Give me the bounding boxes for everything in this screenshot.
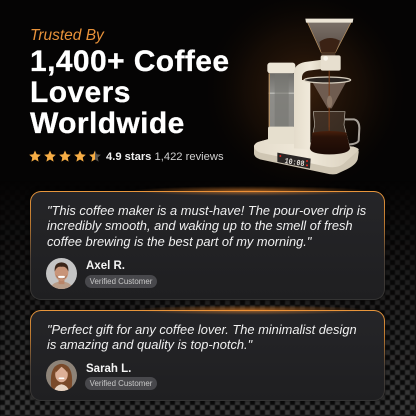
heading: 1,400+ Coffee xyxy=(30,44,229,78)
quote 1: incredibly smooth, and waking up to the smell of fresh xyxy=(47,218,353,233)
icon: star rating xyxy=(29,150,101,162)
panel: review 2 xyxy=(30,310,385,401)
badge: verified xyxy=(85,377,157,390)
card 2 top glow xyxy=(130,305,370,315)
badge: verified xyxy=(85,275,157,288)
name: Axel R.: Axel R. xyxy=(86,260,125,272)
carafe xyxy=(310,110,359,154)
clock display xyxy=(277,153,311,169)
quote 1: "This coffee maker is a must-have! The pour-over drip is xyxy=(47,203,366,218)
card 1 top glow xyxy=(130,186,370,196)
water tank xyxy=(267,63,295,144)
avatar: Sarah L. xyxy=(46,360,77,391)
quote 2: is amazing and quality is top-notch." xyxy=(47,337,252,352)
quote 1: coffee brewing is the best part of my morning." xyxy=(47,234,311,249)
top dripper xyxy=(305,19,353,71)
quote 1 xyxy=(47,203,366,249)
heading: Lovers xyxy=(30,76,131,109)
glow xyxy=(205,0,405,190)
rating row xyxy=(29,150,224,163)
quote 2: "Perfect gift for any coffee lover. The minimalist design xyxy=(47,322,357,336)
badge: verified: Verified Customer xyxy=(90,277,152,286)
lower cone filter xyxy=(304,71,351,127)
clock display: 10:08 xyxy=(284,157,305,169)
badge: verified: Verified Customer xyxy=(90,379,152,388)
panel: review 1 xyxy=(30,191,385,300)
eyebrow: Trusted By: Trusted By xyxy=(30,27,104,44)
rating text: 4.9 stars 1,422 reviews xyxy=(106,151,224,163)
heading: Worldwide xyxy=(30,107,185,140)
avatar: Axel R. xyxy=(46,258,77,289)
heading xyxy=(30,44,229,140)
name: Sarah L.: Sarah L. xyxy=(86,362,131,374)
quote 2 xyxy=(47,322,357,352)
column and arm xyxy=(294,59,325,149)
base xyxy=(254,139,359,174)
product: pour-over coffee maker xyxy=(232,17,378,174)
